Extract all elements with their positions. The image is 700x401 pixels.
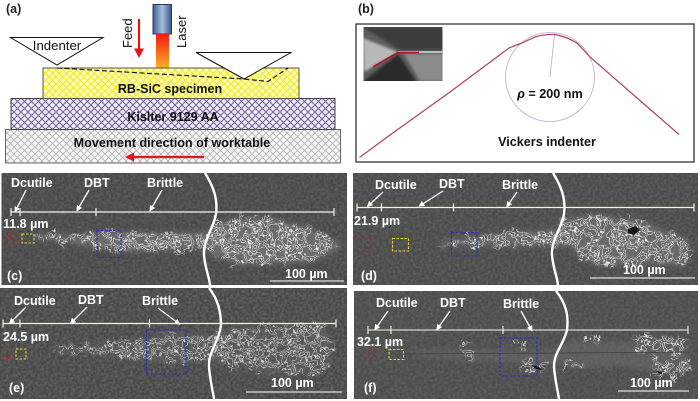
scratch path dashed: [57, 68, 288, 82]
arrows: [11, 307, 178, 323]
region labels: Dcutile: [376, 296, 418, 310]
scale ruler: [3, 320, 336, 328]
radius label: ρ = 200 nm: [516, 87, 583, 101]
region boxes: [356, 232, 477, 256]
region labels: 100 µm: [630, 376, 673, 390]
arrows: [376, 311, 531, 329]
region labels: 21.9 µm: [354, 214, 400, 228]
profile curve: [360, 34, 679, 157]
scale bar: [270, 280, 344, 282]
laser label: Laser: [174, 15, 189, 48]
panel c: SEM scratch: [2, 173, 347, 285]
vickers label: Vickers indenter: [498, 135, 596, 149]
panel label (a): (a): [6, 2, 21, 16]
region labels: Brittle: [147, 176, 183, 190]
region labels: (c): [7, 269, 22, 283]
break line: [554, 291, 568, 399]
region labels: 11.8 µm: [3, 217, 48, 231]
inset micrograph: [360, 27, 443, 84]
scale ruler: [357, 204, 694, 212]
region labels: Brittle: [142, 294, 178, 308]
dynamometer block: Kislter 9129 AA: [127, 110, 219, 124]
specimen block: [43, 68, 299, 98]
region labels: [354, 177, 666, 283]
break line: [209, 288, 221, 399]
region labels: Brittle: [503, 297, 539, 311]
arrows: [369, 191, 517, 205]
region labels: Dcutile: [375, 178, 417, 192]
region boxes: [367, 338, 537, 376]
dynamometer block: [11, 98, 335, 130]
region labels: 100 µm: [271, 376, 314, 390]
region labels: Dcutile: [11, 176, 53, 190]
worktable block: [6, 130, 340, 163]
region labels: 32.1 µm: [357, 335, 403, 349]
scale bar: [618, 390, 689, 392]
panel d: SEM scratch: [353, 173, 698, 285]
region labels: (d): [361, 269, 377, 283]
region labels: [357, 296, 673, 395]
region labels: Dcutile: [14, 294, 56, 308]
region labels: 100 µm: [285, 267, 328, 281]
region labels: 24.5 µm: [3, 330, 49, 344]
panel e: SEM scratch: [0, 288, 347, 399]
panel a: experiment schematic: [6, 4, 340, 163]
region labels: (f): [364, 381, 376, 395]
feed label: Feed: [120, 18, 135, 48]
radius circle: [506, 32, 594, 122]
scale bar: [246, 391, 342, 393]
region labels: Brittle: [502, 178, 538, 192]
left indenter: [10, 38, 103, 65]
region labels: [3, 176, 328, 283]
arrows: [16, 190, 162, 210]
region labels: [3, 293, 314, 395]
right indenter: [196, 52, 291, 79]
region boxes: [8, 230, 121, 258]
laser beam: [156, 34, 169, 68]
laser head: [153, 4, 172, 34]
scale ruler: [368, 326, 688, 334]
left indenter: Indenter: [33, 38, 82, 53]
region labels: DBT: [84, 176, 110, 190]
panel label (b): (b): [358, 2, 374, 16]
region labels: DBT: [440, 296, 466, 310]
region labels: DBT: [78, 293, 104, 307]
region labels: (e): [9, 381, 24, 395]
scale ruler: [11, 208, 334, 216]
feed arrow: [134, 19, 144, 58]
panel f: SEM scratch: [354, 291, 698, 399]
worktable block: Movement direction of worktable: [74, 136, 270, 150]
break line: [552, 173, 564, 285]
region boxes: [3, 330, 186, 374]
break line: [204, 173, 216, 285]
scale bar: [590, 277, 695, 279]
panel b: indenter profile: [356, 24, 694, 162]
worktable arrow: [125, 152, 204, 162]
region labels: DBT: [439, 177, 465, 191]
region labels: 100 µm: [623, 263, 666, 277]
specimen block: RB-SiC specimen: [118, 82, 222, 96]
